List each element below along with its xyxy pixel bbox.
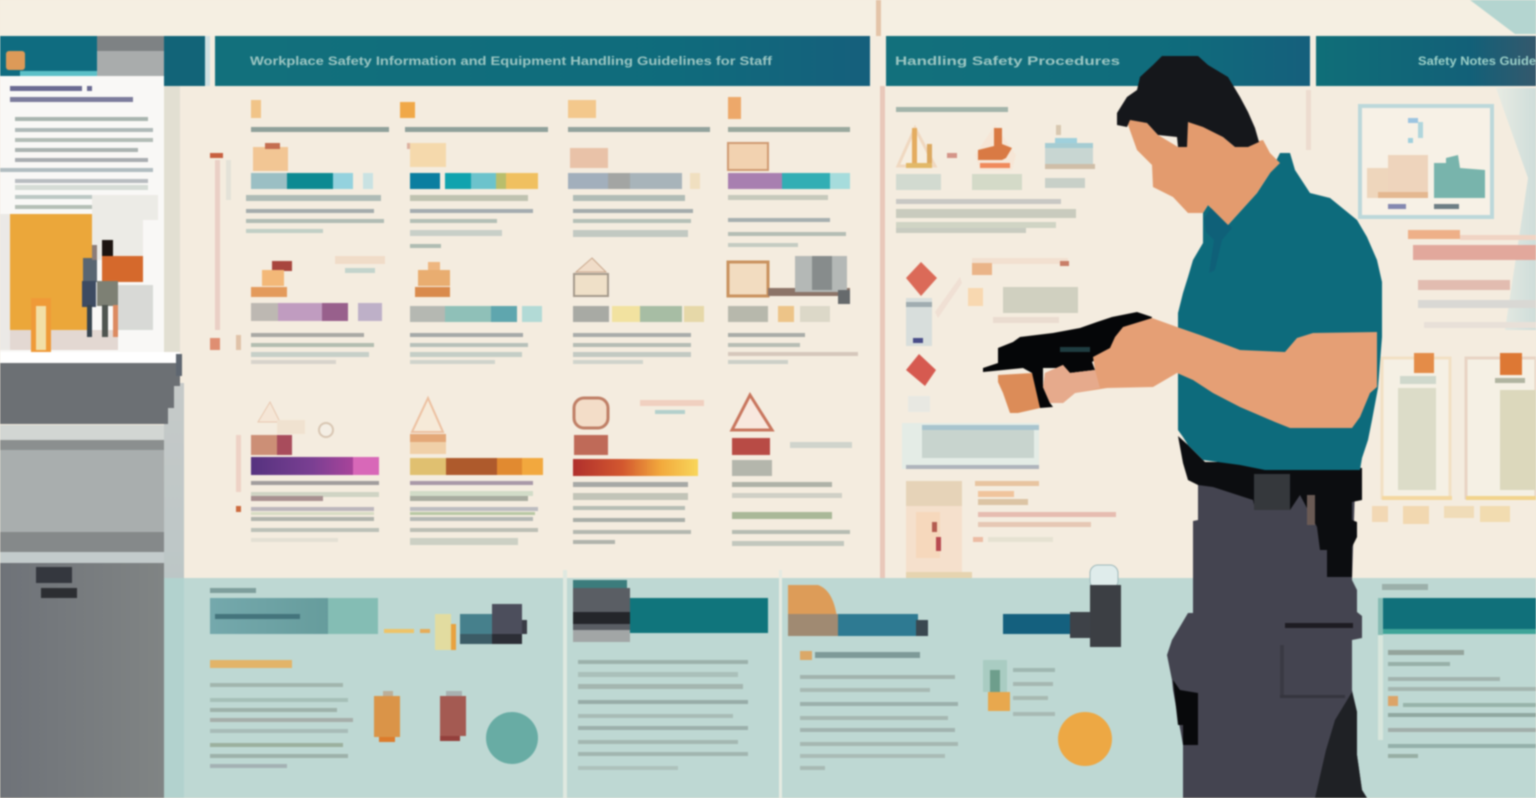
person: [983, 56, 1382, 798]
belt and holster: [1178, 436, 1362, 577]
card 3: [568, 100, 710, 237]
figures in poster: [82, 240, 143, 337]
poster text lines: [0, 86, 153, 209]
header band: middle: Handling Safety Procedures: [895, 54, 1120, 68]
header band: middle: [886, 36, 1310, 86]
panel: card row 1: [246, 97, 850, 248]
card 9: [251, 402, 379, 542]
icon: hazard triangle: [898, 128, 957, 168]
panel: middle column lower: [906, 481, 1116, 582]
panel: bottom teal band: [164, 565, 1536, 798]
card 12: [732, 395, 852, 546]
icon: poster badge: [6, 51, 25, 70]
icon: orange capsule: [374, 691, 400, 742]
icon: teal circle: [486, 712, 538, 764]
icon: burst: [975, 125, 1016, 170]
pants: [1167, 480, 1367, 798]
gun: [983, 312, 1152, 408]
card 7: [573, 258, 704, 364]
section 1: [210, 588, 538, 768]
section 3: [788, 585, 958, 770]
poster orange panel: [10, 214, 92, 330]
face and neck: [1127, 118, 1280, 225]
small indicator icons: [983, 660, 1055, 716]
icon: warning diamond small: [906, 354, 936, 386]
hair: [1117, 56, 1259, 147]
dark leg shadow: [1315, 692, 1367, 798]
icon: cylinder tool: [435, 604, 527, 650]
shirt: [1178, 153, 1382, 470]
header band: main: Workplace Safety Information and Equipment Handling Guidelines for Staff: [250, 54, 773, 68]
card 4: [728, 97, 850, 247]
card 2: [400, 102, 548, 248]
chart card: [1360, 106, 1492, 217]
note card: [1408, 230, 1536, 328]
section 2: [573, 580, 768, 770]
counter / machine at left: [0, 352, 184, 798]
tool at right of section 3: [1003, 565, 1121, 647]
panel: left poster: [0, 36, 210, 356]
header band: right: [1316, 36, 1536, 86]
card 10: [410, 398, 543, 545]
card 11: [573, 398, 704, 544]
header band: main: [215, 36, 870, 86]
icon: red capsule: [440, 691, 466, 741]
panel: middle column diagram: [902, 258, 1078, 469]
arm and hand: [1043, 318, 1377, 428]
card 5: [251, 256, 385, 364]
panel: right column: [1306, 90, 1536, 524]
header band: right: Safety Notes Guide: [1418, 54, 1536, 68]
panel: middle column icons: [896, 107, 1095, 233]
icon: warning diamond: [906, 262, 937, 296]
icon: machine: [1045, 125, 1095, 169]
card 1: [246, 100, 389, 233]
card 6: [410, 262, 542, 364]
section 4: [1378, 584, 1536, 758]
panel: card row 3: [251, 395, 852, 546]
icon: orange circle: [1058, 712, 1112, 766]
lower tall cards: [1372, 353, 1536, 524]
card 8: [728, 256, 858, 364]
panel: card row 2: [251, 256, 858, 364]
far hand: [998, 373, 1040, 413]
left timeline: [210, 153, 241, 512]
black side patch: [1173, 680, 1198, 745]
lighter palm: [1043, 365, 1100, 403]
